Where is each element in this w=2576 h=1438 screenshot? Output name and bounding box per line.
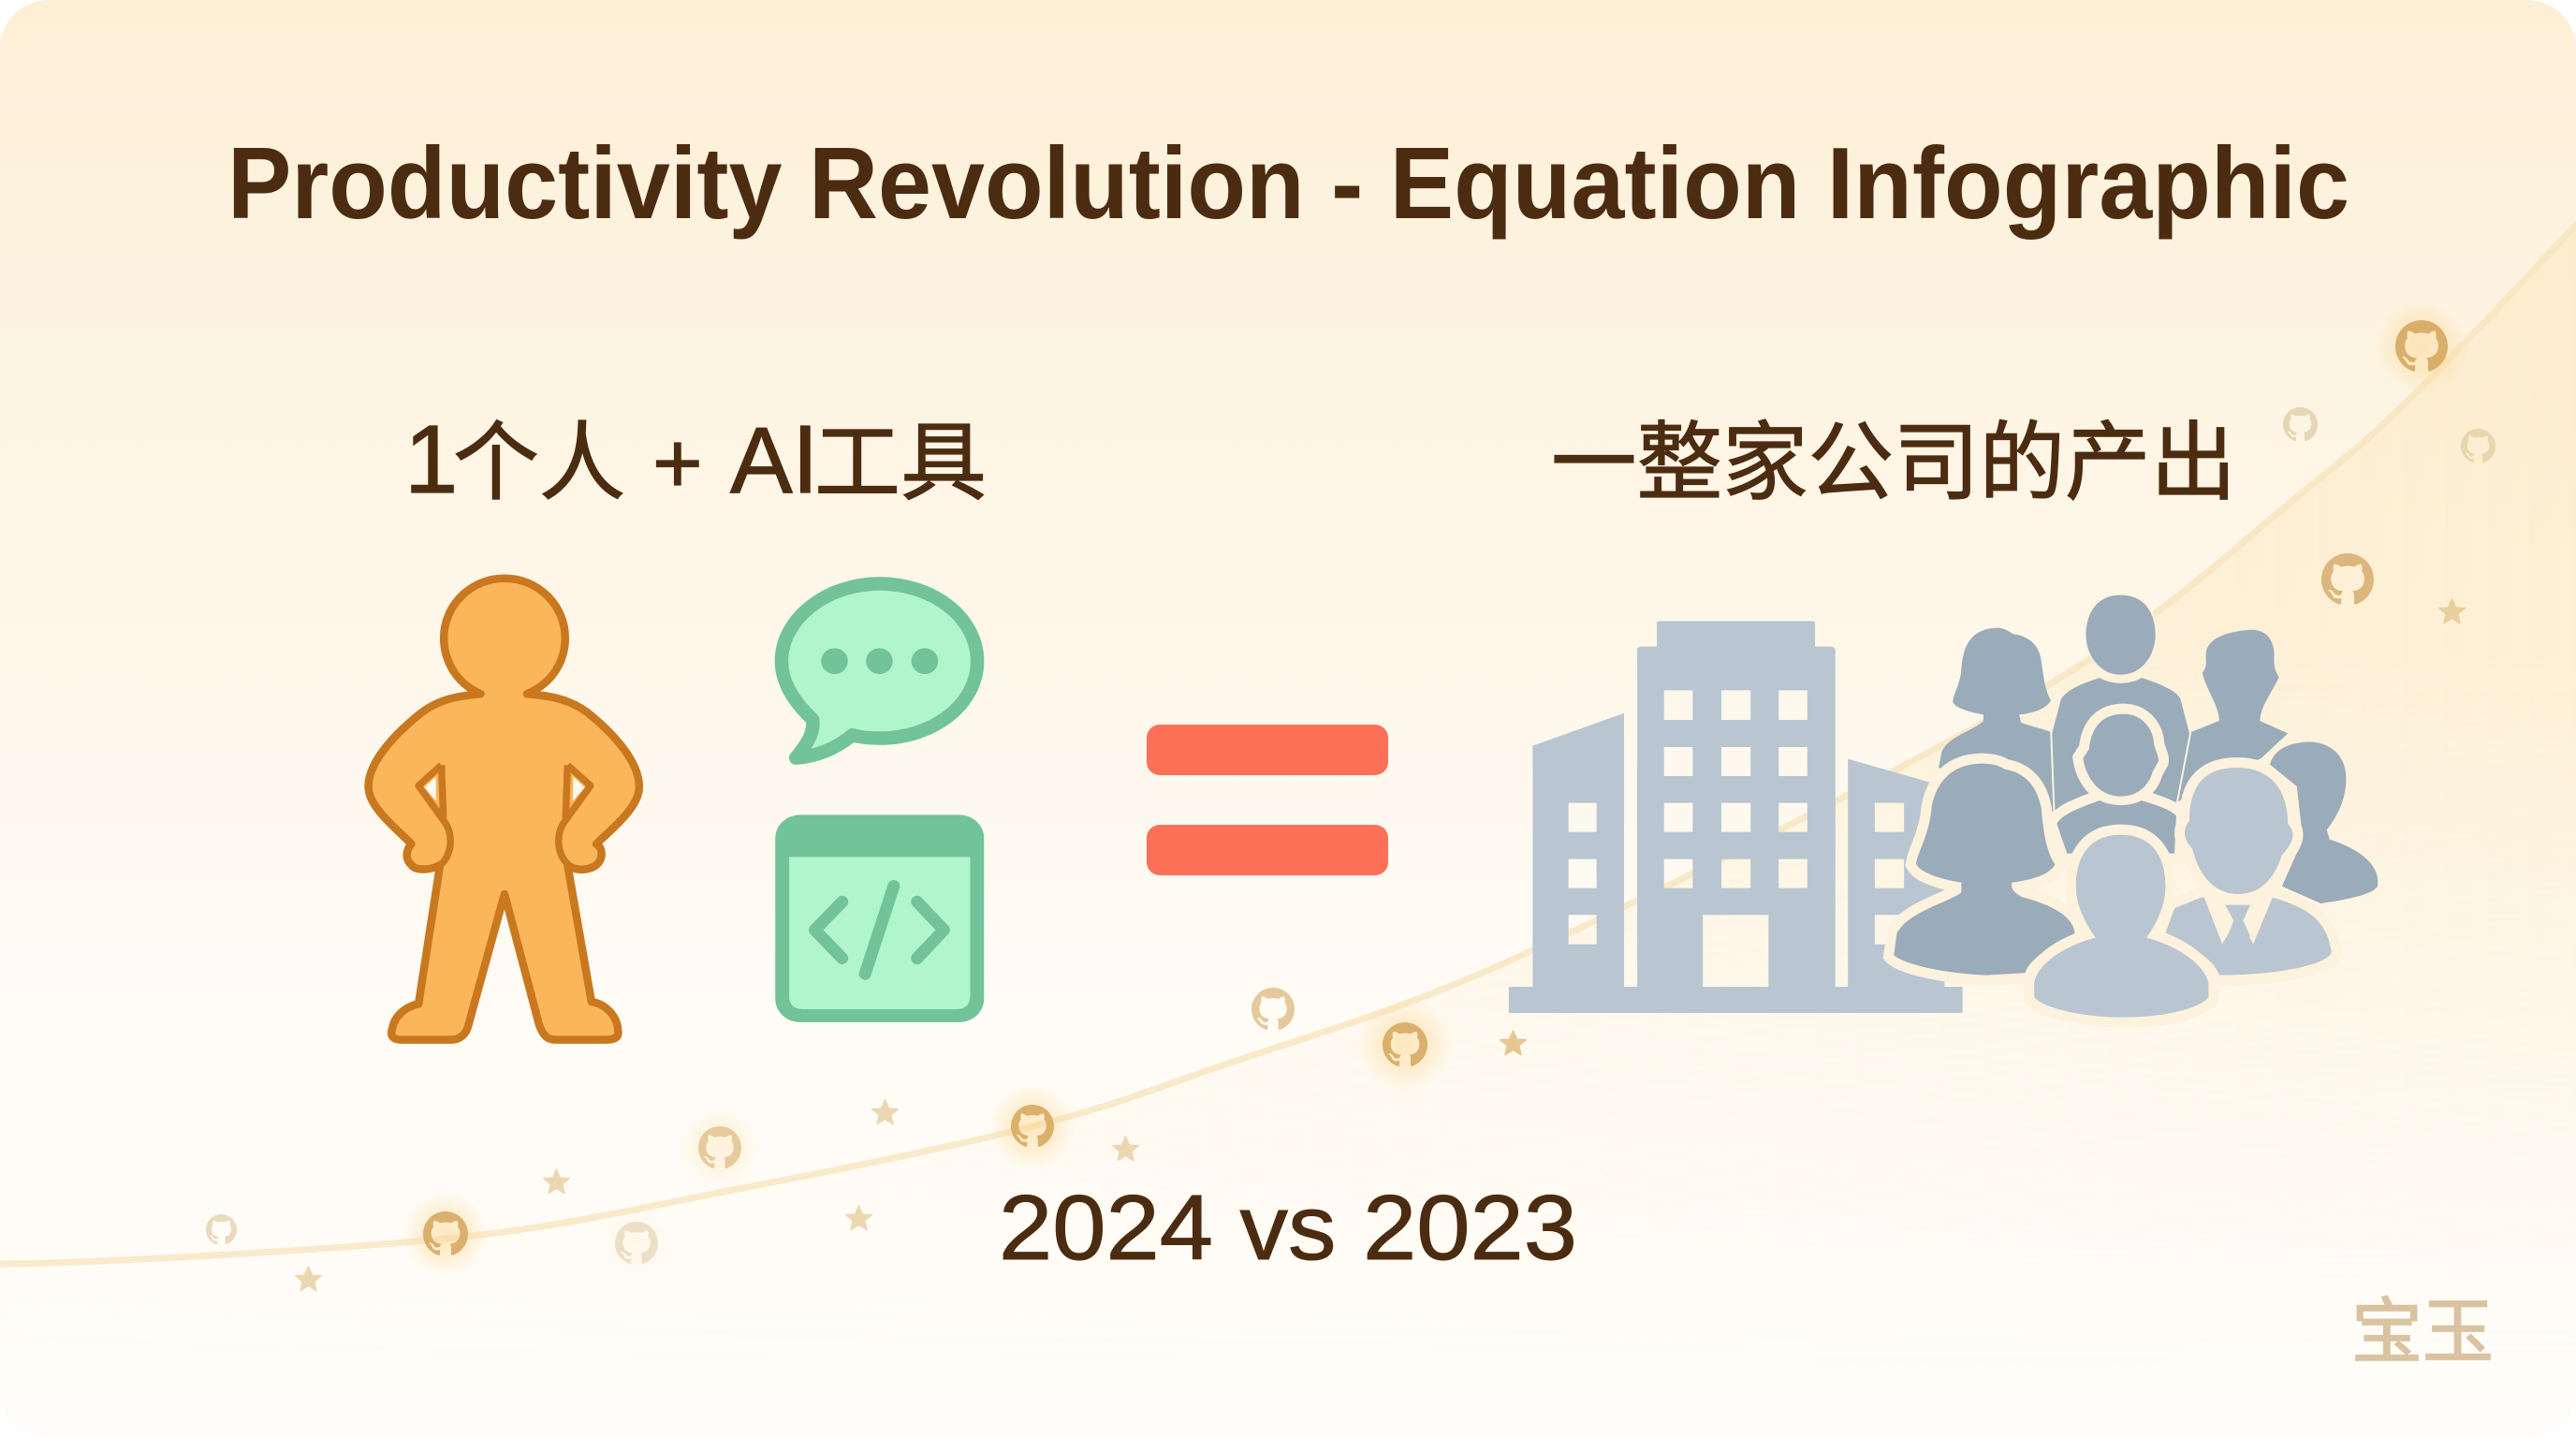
heading: one person plus AI tools: A <box>730 408 793 513</box>
icon: GitHub, faint right <box>2461 429 2496 462</box>
middle person <box>2056 714 2176 854</box>
left arm inner outline <box>418 765 450 865</box>
icon: star <box>296 1267 321 1291</box>
icon: star <box>846 1206 871 1230</box>
icon: GitHub, left medium <box>679 1107 761 1189</box>
icon: company building <box>1509 621 1963 1013</box>
icon: star <box>872 1100 898 1124</box>
icon: green speech bubble <box>782 583 977 758</box>
heading: one person plus AI tools: + <box>652 416 703 511</box>
comparison years label: 2024 vs 2023 <box>999 1176 1577 1279</box>
front center person <box>2034 835 2208 1018</box>
far right person <box>2270 741 2378 903</box>
icon: GitHub, centre faint <box>1251 988 1295 1030</box>
back right person <box>2177 630 2288 802</box>
icon: GitHub, faint <box>2283 407 2318 441</box>
heading: output of a whole company: 一整家公司的产出 <box>1551 416 2236 511</box>
heading: one person plus AI tools: 1 <box>404 405 458 513</box>
icon: GitHub, left faint <box>601 1208 672 1279</box>
icon: GitHub, on curve glowing <box>989 1083 1076 1169</box>
icon: star centre <box>1500 1031 1526 1055</box>
icon: GitHub, far left faint <box>206 1214 237 1244</box>
heading: one person plus AI tools: I <box>792 405 819 513</box>
heading: one person plus AI tools: 个 <box>453 416 539 511</box>
icon: GitHub, medium right <box>2321 553 2374 605</box>
icon: star <box>1113 1137 1138 1161</box>
icon: team of people <box>1894 595 2378 1018</box>
icon: GitHub, upper right, glowing <box>2375 300 2468 393</box>
icon: star <box>544 1169 569 1194</box>
back center person <box>2052 595 2189 812</box>
front left woman <box>1894 764 2075 976</box>
icon: GitHub, left glowing <box>402 1191 489 1277</box>
heading: one person plus AI tools: 工 <box>814 416 900 511</box>
decorative GitHub icons and stars along the curve <box>206 300 2496 1291</box>
icon: orange person with hands on hips <box>369 579 639 1040</box>
growth curve with shaded area <box>0 221 2576 1268</box>
front right man in suit <box>2165 768 2332 976</box>
watermark: 宝玉 <box>2351 1293 2494 1372</box>
heading: one person plus AI tools: 人 <box>539 416 625 511</box>
icon: GitHub, centre glowing <box>1358 998 1452 1092</box>
icon: green code window <box>775 814 984 1022</box>
title: Productivity Revolution - Equation Infographic <box>227 126 2349 241</box>
back left woman <box>1939 628 2088 812</box>
arm gaps <box>424 777 585 801</box>
icon: star right <box>2439 599 2465 624</box>
right arm inner outline <box>559 765 591 865</box>
equals sign <box>1147 725 1388 875</box>
heading: one person plus AI tools: 具 <box>900 416 987 511</box>
